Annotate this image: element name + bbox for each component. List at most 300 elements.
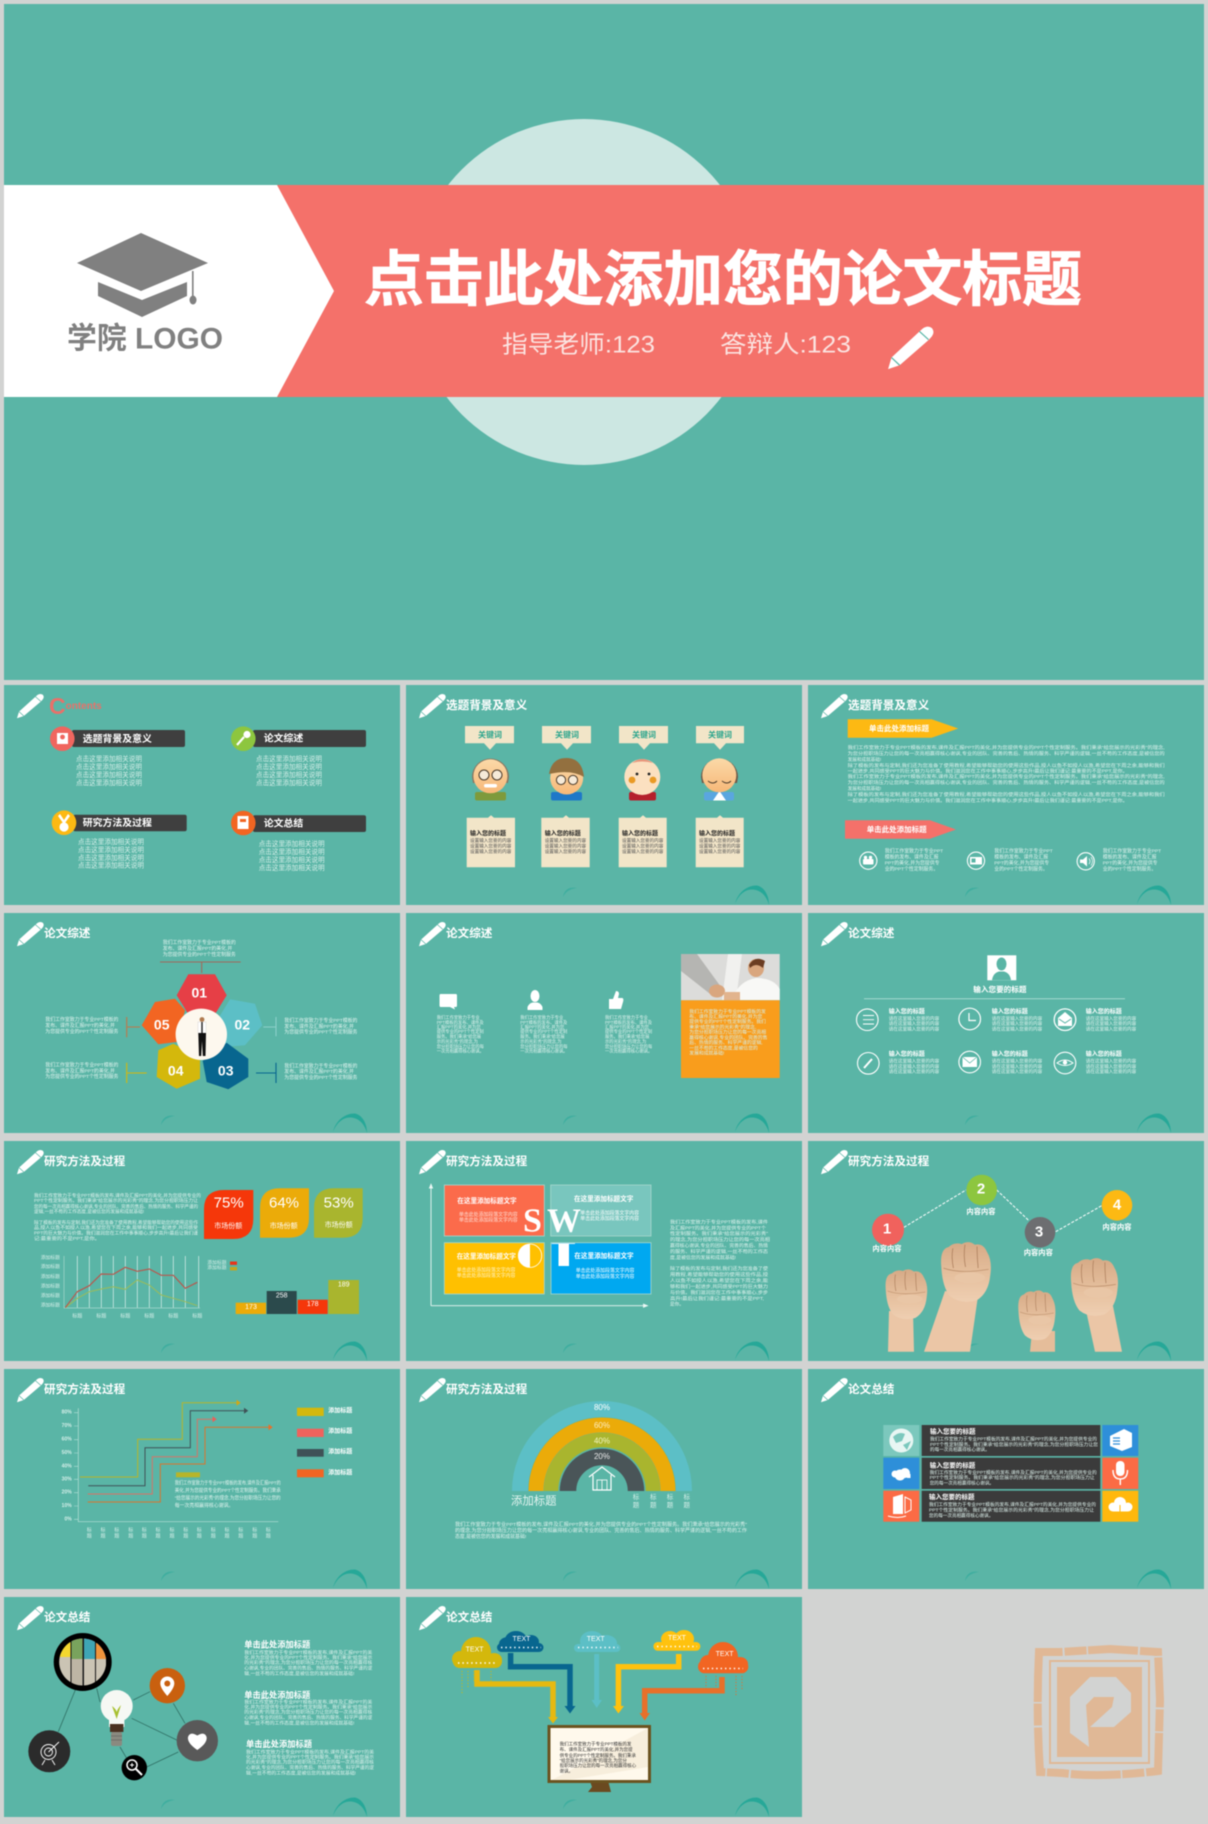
item text 2: 输入您的标题: [992, 1007, 1028, 1015]
decorative arcs: [965, 1341, 1171, 1361]
icon: clock: [959, 1008, 980, 1030]
heading: 选题背景及意义: [446, 698, 528, 712]
step 4: [1102, 1190, 1132, 1232]
white logo arrow: [4, 185, 334, 397]
column text 3: 我们工作室致力于专业: [605, 1014, 649, 1021]
icon: pen: [419, 1606, 446, 1630]
note text: 设置输入您要的内容: [699, 842, 741, 850]
right callout 03: 我们工作室致力于专业PPT模板的: [284, 1062, 357, 1070]
feature text 3: PPT的美化,并为您提供专: [1103, 860, 1158, 866]
main title: 点击此处添加您的论文标题: [364, 246, 1082, 314]
keyword bubbles: 关键词: [632, 730, 656, 740]
paragraph: 我们工作室致力于专业PPT模板的发布,课件及汇报PPT的美化,并为您提供专业的PPT个性定制服务。我们秉承“给您展示的光彩秀”: [455, 1521, 747, 1528]
feature text 3: 模板的发布、课件及汇报: [1103, 854, 1157, 860]
feature text 1: 业的PPT个性定制服务。: [885, 866, 938, 872]
cloud 4: TEXT: [668, 1635, 687, 1642]
column text 2: 汇报PPT的美化,并为您: [520, 1024, 565, 1030]
heading: 研究方法及过程: [44, 1154, 126, 1168]
right paragraph: 我们工作室致力于专业PPT模板的发布,课件: [670, 1218, 768, 1226]
text block 3: 辑,一丝不苟的工作态度,是被信您的发展和成就基础!: [246, 1770, 356, 1776]
note text: 设置输入您要的内容: [622, 848, 664, 855]
text block 3: 的光彩秀”的理念,为您分担职场压力让您的每一次亮相赢得核: [246, 1758, 374, 1766]
quadrant T: 在这里添加标题文字: [574, 1251, 634, 1260]
decorative arcs: [161, 1113, 367, 1133]
column text 1: 汇报PPT的美化,并为您: [437, 1024, 481, 1030]
chart axes and labels: 标: [197, 1526, 202, 1533]
heading: 论文总结: [848, 1382, 895, 1396]
column text 1: 提供专业的PPT个性定制: [437, 1028, 484, 1035]
cloud 1: TEXT: [466, 1646, 484, 1654]
text block 2: 我们工作室致力于专业PPT模板的发布,课件及汇报PPT的美: [244, 1698, 373, 1706]
tile: 64%: 64%: [269, 1194, 299, 1212]
slide background: [4, 1141, 400, 1361]
circle: colored pencils: [54, 1633, 112, 1691]
category labels: 题: [650, 1500, 657, 1508]
percent labels: 60%: [594, 1421, 610, 1430]
item text 2: 请在这里输入您要的内容: [992, 1026, 1043, 1032]
orange text box: 一丝不苟的工作态度,是被信您的: [689, 1044, 758, 1051]
paragraph: 为您分担职场压力让您的每一次亮相赢得核心谢讽,专业的团队、完善的售后、热情的服务、科学严谨的逻辑,一丝不苟的工作态度,是被信您的: [848, 750, 1165, 757]
slide background: [808, 1141, 1204, 1361]
item: method: 点击这里添加相关说明: [78, 853, 144, 862]
line chart: 添加标题: [41, 1273, 60, 1280]
step line orange: [88, 1424, 273, 1502]
annotation: 美化,并为您提供专业的PPT个性定制服务。我们秉承: [175, 1487, 281, 1494]
icon: pen: [17, 694, 44, 718]
quadrant S: 单击此处添加段落文字内容: [459, 1216, 518, 1224]
tile: 75%: [204, 1190, 253, 1239]
tile: 75%: 市场份额: [214, 1221, 242, 1230]
right paragraph: 用教程,希望能够帮助您的使用这些作品,授: [670, 1271, 768, 1278]
line chart: 标题: [192, 1312, 202, 1319]
circle: target: [28, 1730, 70, 1772]
decorative arcs: [563, 1797, 769, 1817]
item: review: 论文综述: [264, 732, 303, 744]
icon: house: [589, 1467, 615, 1490]
legend: [297, 1406, 352, 1477]
step 2: 内容内容: [966, 1207, 996, 1216]
item text 5: 请在这里输入您要的内容: [992, 1063, 1043, 1070]
item text 3: 输入您的标题: [1086, 1007, 1122, 1015]
panel: method, market share: [4, 1141, 400, 1361]
letter W: W: [547, 1202, 581, 1240]
category labels: [633, 1492, 690, 1508]
panel: review, five petals: [4, 913, 400, 1133]
orange text box: [681, 1000, 780, 1078]
paragraph block: 品,授人以鱼不如授人以渔,希望您在下周之余,能够和我们一起进步,共同感受: [34, 1224, 198, 1231]
legend: 添加标题: [328, 1468, 352, 1476]
bar chart: 189: [338, 1282, 350, 1288]
petal 04: [157, 1044, 200, 1089]
item text 1: 输入您的标题: [889, 1007, 925, 1015]
center circle with figure: [176, 1009, 227, 1060]
heading: 论文总结: [446, 1610, 493, 1624]
photo: raised fists: [886, 1242, 1122, 1352]
cloud 5: [698, 1642, 748, 1695]
step line coral: [88, 1416, 217, 1494]
item: review: 点击这里添加相关说明: [256, 762, 322, 771]
cloud 3: TEXT: [587, 1636, 605, 1643]
item: background: 点击这里添加相关说明: [76, 754, 142, 763]
item text 2: 请在这里输入您要的内容: [992, 1020, 1043, 1027]
row 1: [883, 1425, 1138, 1456]
tile: 53%: 53%: [324, 1194, 354, 1212]
right paragraph: 的理念,为您分担职场压力让您的每一次亮相: [670, 1236, 770, 1243]
quadrant O: 在这里添加标题文字: [457, 1252, 516, 1260]
right callout 02: 为您提供专业的PPT个性定制服务: [284, 1028, 357, 1036]
slide background: [4, 1597, 400, 1817]
feature text 3: 业的PPT个性定制服务。: [1103, 866, 1156, 872]
panel: conclusion, clouds and screen: [406, 1597, 802, 1817]
keyword bubbles: 关键词: [478, 730, 502, 740]
column text 2: PPT模板的发布、课件及: [520, 1019, 568, 1026]
legend: 添加标题: [328, 1406, 352, 1414]
left callout 05: 我们工作室致力于专业PPT模板的: [45, 1016, 118, 1023]
quadrant O: 单击此处添加段落文字内容: [457, 1266, 515, 1274]
feature text 3: 我们工作室致力于专业PPT: [1103, 848, 1161, 854]
line chart: 标题: [144, 1312, 154, 1319]
item: conclusion: [231, 811, 366, 872]
line chart: [41, 1254, 202, 1319]
chart axes and labels: 题: [197, 1533, 202, 1539]
paragraph: 一起进步,共同感受PPT的巨大魅力与价值。我们滋润您在工作中事事顺心,步步高升!最后让我们谨记:最重要的不是PPT,是你。: [848, 768, 1128, 774]
chart axes and labels: 标: [155, 1526, 161, 1533]
tile: 53%: 市场份额: [325, 1220, 353, 1229]
icon: pen: [17, 1378, 44, 1402]
chart axes and labels: 标: [224, 1526, 230, 1533]
annotation: “给您展示的光彩秀”的理念,为您分担职场压力让您的: [175, 1494, 281, 1502]
item text 1: 请在这里输入您要的内容: [889, 1020, 940, 1027]
text block 3: 我们工作室致力于专业PPT模板的发布,课件及汇报PPT的美: [246, 1748, 374, 1756]
arrow navy: [511, 1653, 576, 1714]
item text 6: 请在这里输入您要的内容: [1086, 1063, 1137, 1070]
feature text 3: [1103, 848, 1161, 872]
heading: 研究方法及过程: [446, 1382, 528, 1396]
quadrant T: 单击此处添加段落文字内容: [576, 1273, 634, 1280]
centered title: 输入您要的标题: [973, 984, 1027, 994]
keyword bubbles: 关键词: [708, 730, 732, 740]
chart legend: [207, 1259, 237, 1271]
row 2: [883, 1458, 1138, 1489]
item: conclusion: 点击这里添加相关说明: [259, 839, 325, 848]
icon: thumbs up: [609, 991, 623, 1009]
line chart: 标题: [72, 1312, 82, 1319]
column text 2: 您分担职场压力让您的每: [520, 1043, 568, 1050]
keyword bubbles: 关键词: [555, 730, 579, 740]
bar chart: [236, 1280, 359, 1314]
step 4: 4: [1113, 1196, 1122, 1214]
chart title: 添加标题: [511, 1494, 557, 1508]
arrow orange: [640, 1677, 722, 1720]
column text 2: 提供专业的PPT个性定制: [520, 1028, 567, 1035]
paragraph: 除了模板的发布与定制,我们还为您准备了使用教程,希望能够帮助您的使用这些作品,授人以鱼不如授人以渔,希望您在下周之余,能够和我们: [848, 791, 1165, 798]
chart axes and labels: 40%: [62, 1463, 72, 1469]
quadrant O: [444, 1243, 544, 1294]
right paragraph: 性定制服务。我们秉承“给您展示的光彩秀”: [670, 1230, 769, 1237]
slide background: [808, 913, 1204, 1133]
text block 1: 单击此处添加标题: [244, 1640, 311, 1650]
panel: conclusion, network: [4, 1597, 400, 1817]
icon: pen: [888, 327, 933, 369]
right paragraph: 度,是被信您的发展和成就基础!: [670, 1254, 736, 1261]
line chart: 标题: [120, 1312, 130, 1319]
character: baby: [624, 759, 660, 800]
step 2: [966, 1175, 997, 1216]
text block 2: 心谢讽,专业的团队、完善的售后、热情的服务、科学严谨的逻: [244, 1714, 373, 1721]
paragraph: [848, 744, 1165, 804]
icon: graduation cap: [77, 233, 208, 317]
panel: title slide: [4, 4, 1204, 680]
chart axes and labels: 题: [128, 1533, 133, 1539]
chart axes and labels: 0%: [64, 1516, 72, 1522]
column text 3: 一次亮相赢得核心谢讽。: [605, 1048, 652, 1054]
paragraph block: PPT的巨大魅力与价值。我们滋润您在工作中事事顺心,步步高升!最后让我们谨: [34, 1230, 198, 1236]
logo text: 学院 LOGO: [67, 322, 223, 356]
step line dark: [88, 1408, 248, 1486]
heading: 论文综述: [446, 926, 493, 940]
cloud 5: TEXT: [716, 1651, 734, 1658]
line chart: 添加标题: [41, 1282, 60, 1290]
petal 04: 04: [168, 1062, 184, 1078]
orange text box: 提供专业的PPT个性定制服务。我们: [689, 1018, 766, 1025]
chart axes and labels: 题: [142, 1533, 147, 1539]
circle: map pin: [150, 1668, 185, 1703]
icon: pen: [419, 694, 446, 718]
yellow arrow label: [848, 719, 958, 738]
petal 01: 01: [192, 985, 207, 1001]
row 3: [883, 1491, 1138, 1522]
heading: 论文综述: [44, 926, 91, 940]
item text 1: 请在这里输入您要的内容: [889, 1015, 940, 1022]
paragraph: 的理念,为您分担职场压力让您的每一次亮相赢得核心谢讽,专业的团队、完善的售后、热情的服务、科学严谨的逻辑,一丝不苟的工作: [455, 1527, 747, 1534]
watermark stamp: [1038, 1649, 1160, 1775]
column text 1: 您分担职场压力让您的每: [437, 1043, 485, 1050]
chart axes and labels: 题: [114, 1533, 119, 1539]
icon: pen: [419, 1150, 446, 1174]
item: background: 点击这里添加相关说明: [76, 770, 142, 779]
right paragraph: 及汇报PPT的美化,并为您提供专业的PPT个: [670, 1224, 766, 1232]
monitor: 谢讽。: [560, 1768, 573, 1774]
item text 1: [889, 1007, 940, 1032]
text block 3: 单击此处添加标题: [246, 1739, 313, 1749]
cloud 3: [574, 1631, 620, 1652]
left callout 04: 为您提供专业的PPT个性定制服务: [45, 1073, 118, 1080]
column text 2: 一次亮相赢得核心谢讽。: [520, 1048, 568, 1054]
row 3: PPT个性定制服务。我们秉承“给您展示的光彩秀”的理念,为您分担职场压力让: [929, 1506, 1094, 1514]
chart axes and labels: 题: [183, 1533, 188, 1539]
right callout 02: 发布、课件及汇报PPT的美化,并: [284, 1023, 354, 1030]
icon: list: [856, 1009, 878, 1030]
item text 3: 请在这里输入您要的内容: [1086, 1020, 1137, 1027]
orange text box: 布、课件及汇报PPT的美化,并为您: [689, 1013, 763, 1020]
note text: 设置输入您要的内容: [622, 837, 664, 844]
presenter: 答辩人:123: [720, 332, 851, 358]
line chart: 添加标题: [41, 1254, 60, 1261]
chart axes and labels: 50%: [62, 1450, 72, 1456]
paragraph block: [34, 1192, 201, 1242]
coral title band: [277, 185, 1204, 397]
petal 02: [213, 999, 262, 1047]
item: method: 点击这里添加相关说明: [78, 837, 144, 846]
panel: contents: [4, 685, 400, 905]
icon: pen: [821, 1150, 848, 1174]
chart axes and labels: 标: [252, 1526, 257, 1533]
chart axes and labels: 题: [155, 1533, 161, 1539]
text block 1: 我们工作室致力于专业PPT模板的发布,课件及汇报PPT的美: [244, 1649, 373, 1656]
arrow gold: [613, 1654, 679, 1714]
note text: 设置输入您要的内容: [622, 842, 664, 850]
note text: 设置输入您要的内容: [545, 837, 586, 844]
paragraph block: PPT个性定制服务。我们秉承“给您展示的光彩秀”的理念,为您分担职场压力让: [34, 1197, 198, 1204]
item text 4: 请在这里输入您要的内容: [889, 1068, 940, 1075]
slide background: [406, 913, 802, 1133]
tile: 64%: 市场份额: [270, 1221, 298, 1230]
row 3: 输入您要的标题: [929, 1492, 975, 1501]
percent labels: 20%: [594, 1452, 610, 1461]
feature text 2: 我们工作室致力于专业PPT: [994, 848, 1053, 854]
text block 2: 单击此处添加标题: [244, 1690, 311, 1700]
note text: 设置输入您要的内容: [470, 848, 512, 855]
circle: magnifier: [122, 1755, 147, 1780]
text block 2: 辑,一丝不苟的工作态度,是被信您的发展和成就基础!: [244, 1720, 354, 1726]
left callout 04: [45, 1062, 147, 1083]
row 3: 您的每一次亮相赢得核心谢讽。: [929, 1512, 993, 1519]
category labels: 题: [633, 1500, 640, 1508]
item text 6: 请在这里输入您要的内容: [1086, 1068, 1137, 1075]
text block 2: 的光彩秀”的理念,为您分担职场压力让您的每一次亮相赢得核: [244, 1708, 373, 1716]
chart axes and labels: 标: [114, 1526, 119, 1533]
note text: 设置输入您要的内容: [699, 848, 741, 855]
note text: 设置输入您要的内容: [545, 842, 586, 850]
icon: pen: [419, 1378, 446, 1402]
icon: pen: [17, 922, 44, 946]
text block 1: 心谢讽,专业的团队、完善的售后、热情的服务、科学严谨的逻: [244, 1664, 373, 1672]
row 2: PPT个性定制服务。我们秉承“给您展示的光彩秀”的理念,为您分担职场压力让: [930, 1474, 1095, 1481]
item text 3: [1086, 1007, 1137, 1032]
divider: [864, 997, 1125, 1000]
column text 3: 服务。我们秉承“给您展: [605, 1033, 650, 1040]
step 1: [872, 1214, 904, 1253]
percent labels: 40%: [594, 1436, 610, 1446]
annotation: [175, 1472, 281, 1509]
slide background: [4, 913, 400, 1133]
row 2: 您的每一次亮相赢得核心谢讽。: [930, 1480, 994, 1486]
icon: pen: [17, 1606, 44, 1630]
slide background: [808, 1369, 1204, 1589]
character: man with brown hair: [549, 758, 584, 800]
text block 3: 化,并为您提供专业的PPT个性定制服务。我们秉承“给您展示: [246, 1754, 374, 1760]
line chart: 添加标题: [41, 1302, 60, 1308]
character: bald man: [701, 758, 738, 800]
icon: envelope: [959, 1051, 980, 1073]
letter S: S: [523, 1202, 542, 1240]
contents heading: Contents: [49, 693, 102, 719]
left callout 05: [45, 1016, 140, 1037]
decorative arcs: [965, 885, 1171, 905]
right paragraph: 是你。: [670, 1300, 684, 1308]
pale circle behind band: [411, 119, 757, 465]
panel: review, photo: [406, 913, 802, 1133]
monitor: [549, 1726, 650, 1792]
decorative arcs: [563, 1341, 769, 1361]
monitor: 供专业的PPT个性定制服务。我们秉承: [560, 1752, 636, 1759]
petal 02: 02: [235, 1017, 250, 1033]
category labels: 标: [650, 1492, 657, 1500]
paragraph block: 记:最重要的不是PPT,是你。: [34, 1235, 100, 1242]
right callout 03: 为您提供专业的PPT个性定制服务: [284, 1074, 357, 1081]
chart axes and labels: 题: [266, 1533, 271, 1539]
decorative arcs: [563, 1113, 769, 1133]
step 3: 3: [1035, 1224, 1043, 1240]
item text 5: [992, 1050, 1043, 1075]
chart axes and labels: 题: [211, 1533, 216, 1539]
note cards: [467, 815, 744, 867]
right paragraph: 除了模板的发布与定制,我们还为您准备了使: [670, 1265, 768, 1272]
slide background: [4, 685, 400, 905]
note text: [470, 830, 741, 855]
feature text 2: PPT的美化,并为您提供专: [994, 860, 1049, 866]
text block 2: [244, 1690, 373, 1726]
panel: method, step chart: [4, 1369, 400, 1589]
step 3: 内容内容: [1024, 1248, 1054, 1257]
category labels: 题: [667, 1500, 674, 1508]
item text 5: 输入您的标题: [992, 1050, 1028, 1058]
right paragraph: 够和我们一起进步,共同感受PPT的巨大魅力: [670, 1283, 768, 1290]
annotation: 我们工作室致力于专业PPT模板的发布,课件及汇报PPT的: [175, 1480, 281, 1486]
item: method: 研究方法及过程: [83, 816, 152, 829]
arrow yellow: [477, 1670, 558, 1724]
right paragraph: 人以鱼不如授人以渔,希望您在下周之余,能: [670, 1277, 768, 1284]
column text 2: [520, 1014, 568, 1054]
icon: portrait tile: [987, 955, 1016, 980]
step 3: [1024, 1217, 1055, 1257]
chart axes and labels: 20%: [62, 1490, 72, 1496]
item: review: 点击这里添加相关说明: [256, 778, 322, 787]
row 1: 的每一次亮相赢得核心谢讽。: [930, 1446, 990, 1453]
petal 01: [177, 974, 227, 1017]
text block 1: 的光彩秀”的理念,为您分担职场压力让您的每一次亮相赢得核: [244, 1659, 373, 1666]
heading: 论文总结: [44, 1610, 91, 1624]
monitor: 布、课件及汇报PPT的美化,并为您提: [560, 1746, 633, 1753]
chart axes and labels: 10%: [62, 1503, 72, 1509]
top callout: 我们工作室致力于专业PPT模板的: [163, 939, 236, 946]
chart axes and labels: 题: [252, 1533, 257, 1539]
item text 6: 输入您的标题: [1086, 1050, 1122, 1058]
line chart: 标题: [168, 1312, 178, 1319]
category labels: 标: [633, 1492, 640, 1500]
quadrant W: 单击此处添加段落文字内容: [580, 1215, 639, 1222]
paragraph: 一起进步,共同感受PPT的巨大魅力与价值。我们滋润您在工作中事事顺心,步步高升!最后让我们谨记:最重要的不是PPT,是你。: [848, 797, 1128, 804]
right paragraph: 的服务、科学严谨的逻辑,一丝不苟的工作态: [670, 1248, 768, 1255]
chart axes and labels: 标: [266, 1526, 271, 1533]
step 2: 2: [977, 1180, 985, 1198]
row 3: 我们工作室致力于专业PPT模板的发布,课件及汇报PPT的美化,并为您提供专业的: [929, 1501, 1096, 1508]
line chart: 标题: [96, 1312, 106, 1319]
arrow teal: [592, 1654, 602, 1708]
item: background: 点击这里添加相关说明: [76, 762, 142, 771]
decorative arcs: [563, 1569, 769, 1589]
paragraph: 为您分担职场压力让您的每一次亮相赢得核心谢讽,专业的团队、完善的售后、热情的服务、科学严谨的逻辑,一丝不苟的工作态度,是被信您的: [848, 779, 1165, 786]
quadrant T: [551, 1243, 651, 1294]
icon: pencil: [858, 1052, 879, 1074]
chart axes and labels: 题: [169, 1533, 175, 1539]
right paragraph: 与价值。我们滋润您在工作中事事顺心,步步: [670, 1289, 768, 1296]
orange text box: 我们工作室致力于专业PPT模板的发: [689, 1008, 766, 1015]
icon: speaker: [1077, 853, 1094, 870]
decorative arcs: [161, 1569, 367, 1589]
note text: 输入您的标题: [622, 830, 658, 838]
tile: 64%: [260, 1188, 309, 1238]
